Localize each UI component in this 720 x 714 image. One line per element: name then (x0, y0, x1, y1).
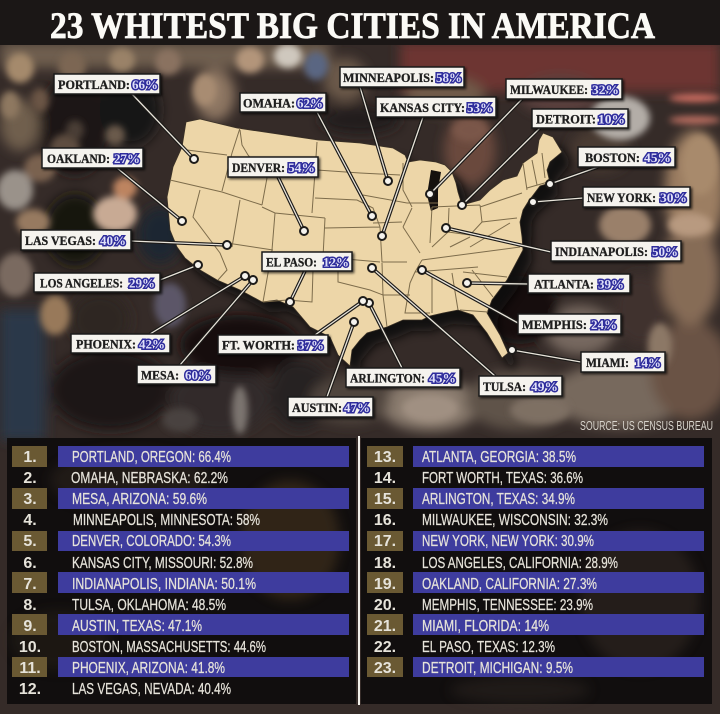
callout: Oakland (42, 148, 186, 225)
panel: ranking 1 to 12: 9. (23, 618, 37, 635)
callout: El Paso: EL PASO: (266, 254, 317, 270)
callout: Miami (508, 346, 665, 372)
callout: Miami: 14% (635, 355, 661, 370)
panel: ranking 13 to 23 (361, 438, 712, 704)
callout: Indianapolis: INDIANAPOLIS: (555, 244, 648, 259)
callout: Milwaukee (426, 79, 622, 198)
panel: ranking 1 to 12: OMAHA, NEBRASKA: 62.2% (71, 470, 228, 487)
callout: Boston: BOSTON: (585, 150, 640, 165)
panel: ranking 1 to 12: LAS VEGAS, NEVADA: 40.4% (72, 681, 231, 698)
callout: Arlington: ARLINGTON: (350, 370, 425, 386)
state borders (170, 128, 548, 327)
callout: Boston: 45% (644, 150, 671, 165)
callout: Omaha (240, 93, 376, 220)
panel: ranking 1 to 12: 11. (19, 660, 41, 677)
panel: ranking 13 to 23: EL PASO, TEXAS: 12.3% (422, 639, 555, 656)
callout: Arlington (346, 299, 460, 387)
panel: ranking 1 to 12: INDIANAPOLIS, INDIANA: 50.1% (72, 576, 256, 593)
callout: Indianapolis: 50% (652, 244, 678, 259)
title: 23 WHITEST BIG CITIES IN AMERICA (50, 6, 655, 47)
callout: Las Vegas: 40% (100, 233, 126, 248)
panel: ranking 13 to 23: FORT WORTH, TEXAS: 36.6% (422, 470, 583, 487)
callout: Portland: 66% (132, 77, 158, 92)
map of the United States (167, 119, 571, 377)
panel: ranking 1 to 12: 5. (23, 533, 37, 550)
panel: ranking 1 to 12: PHOENIX, ARIZONA: 41.8% (72, 660, 225, 677)
panel: ranking 13 to 23: 21. (374, 618, 396, 635)
panel: ranking 1 to 12: 7. (23, 576, 37, 593)
panel: ranking 1 to 12 (7, 438, 356, 704)
panel: ranking 13 to 23: 22. (374, 639, 396, 656)
callout: Minneapolis (340, 67, 464, 185)
callout: Milwaukee: MILWAUKEE: (510, 82, 588, 97)
panel: ranking 13 to 23: NEW YORK, NEW YORK: 30.9% (422, 533, 594, 550)
callout: Austin (288, 318, 373, 417)
callout: El Paso (262, 252, 352, 306)
callout: Las Vegas: LAS VEGAS: (25, 233, 96, 248)
panel: ranking 13 to 23: 16. (374, 512, 396, 529)
panel: ranking 13 to 23: 17. (374, 533, 396, 550)
panel: ranking 13 to 23: MILWAUKEE, WISCONSIN: 32.3% (422, 512, 608, 529)
callout: Atlanta (463, 274, 630, 293)
title bar (0, 0, 720, 47)
callout: Atlanta: 39% (598, 276, 624, 292)
panel: ranking 13 to 23: MEMPHIS, TENNESSEE: 23.9% (422, 597, 593, 614)
callout: Atlanta: ATLANTA: (534, 276, 594, 292)
callout: Detroit: 10% (598, 112, 625, 126)
panel: ranking 1 to 12: PORTLAND, OREGON: 66.4% (72, 449, 231, 466)
callout: Portland (54, 74, 198, 163)
callout: Kansas City (376, 97, 496, 240)
panel: ranking 1 to 12: TULSA, OKLAHOMA: 48.5% (72, 597, 226, 614)
callout: Mesa: 60% (185, 368, 211, 382)
panel: ranking 13 to 23: OAKLAND, CALIFORNIA: 27.3% (422, 576, 597, 593)
callout: Memphis: MEMPHIS: (522, 317, 587, 332)
callout: Tulsa (368, 264, 562, 396)
panel: ranking 1 to 12: 2. (23, 470, 37, 487)
callout: Tulsa: 49% (531, 379, 558, 394)
panel: ranking 1 to 12: 10. (19, 639, 41, 656)
callout: Memphis: 24% (591, 317, 617, 332)
panel: ranking 1 to 12: 8. (23, 597, 37, 614)
callout: Detroit (458, 109, 628, 209)
panel: ranking 13 to 23: ATLANTA, GEORGIA: 38.5% (422, 449, 576, 466)
callout: Minneapolis: MINNEAPOLIS: (343, 70, 434, 85)
callout: Detroit: DETROIT: (536, 112, 596, 126)
callout: Milwaukee: 32% (592, 82, 619, 97)
callout: Los Angeles: LOS ANGELES: (40, 276, 123, 290)
callout: Los Angeles (34, 261, 202, 292)
panel: ranking 13 to 23: 19. (374, 576, 396, 593)
callout: Oakland: 27% (114, 151, 140, 166)
panel: ranking 1 to 12: AUSTIN, TEXAS: 47.1% (72, 618, 202, 635)
callout: Las Vegas (21, 230, 231, 250)
callout: Memphis (418, 266, 621, 334)
panel: ranking 13 to 23: ARLINGTON, TEXAS: 34.9% (422, 491, 575, 508)
panel: ranking 13 to 23: MIAMI, FLORIDA: 14% (422, 618, 549, 635)
callout: Ft. Worth (218, 297, 367, 354)
callout: Ft. Worth: FT. WORTH: (222, 338, 295, 352)
panel: ranking 1 to 12: 12. (19, 681, 41, 698)
callout: Austin: AUSTIN: (292, 400, 342, 415)
panel: ranking 13 to 23: 20. (374, 597, 396, 614)
callout: Phoenix: PHOENIX: (76, 336, 136, 352)
callout: Indianapolis (442, 224, 681, 261)
panel: ranking 13 to 23: DETROIT, MICHIGAN: 9.5% (422, 660, 573, 677)
callout: Omaha: 62% (297, 96, 323, 110)
callout: Omaha: OMAHA: (243, 96, 295, 110)
callout: Denver: DENVER: (232, 160, 285, 175)
callout: Minneapolis: 58% (436, 70, 462, 85)
callout: New York: 30% (660, 190, 687, 205)
panel: ranking 1 to 12: 3. (23, 491, 37, 508)
panel: ranking 13 to 23: 13. (374, 449, 396, 466)
panel: ranking 13 to 23: 15. (374, 491, 396, 508)
callout: Oakland: OAKLAND: (47, 151, 110, 166)
callout: Phoenix: 42% (139, 336, 165, 352)
callout: Los Angeles: 29% (129, 276, 155, 290)
Lake Michigan (427, 170, 441, 211)
callout: Arlington: 45% (429, 370, 456, 386)
panel: ranking 1 to 12: MINNEAPOLIS, MINNESOTA: 58% (73, 512, 260, 529)
callout: Kansas City: 53% (467, 100, 493, 115)
callout: Austin: 47% (344, 400, 370, 415)
callout: Mesa (137, 276, 257, 384)
panel: ranking 1 to 12: BOSTON, MASSACHUSETTS: 44.6% (72, 639, 266, 656)
callout: New York: NEW YORK: (587, 190, 656, 205)
panel: ranking 13 to 23: 18. (374, 555, 396, 572)
panel: ranking 13 to 23: LOS ANGELES, CALIFORNIA: 28.9% (422, 555, 618, 572)
callout: New York (529, 187, 690, 207)
callout: Ft. Worth: 37% (298, 338, 324, 352)
callout: Kansas City: KANSAS CITY: (380, 100, 465, 115)
callout: Denver (228, 157, 318, 235)
callout: Mesa: MESA: (141, 368, 179, 382)
callout: Miami: MIAMI: (586, 355, 629, 370)
panel: ranking 1 to 12: KANSAS CITY, MISSOURI: 52.8% (72, 555, 253, 572)
callout: Tulsa: TULSA: (483, 379, 526, 394)
panel: ranking 1 to 12: 4. (23, 512, 37, 529)
callout: Phoenix (71, 272, 249, 353)
panel: ranking 13 to 23: 14. (374, 470, 396, 487)
panel: ranking 1 to 12: MESA, ARIZONA: 59.6% (72, 491, 207, 508)
panel: ranking 1 to 12: DENVER, COLORADO: 54.3% (72, 533, 231, 550)
callout: Portland: PORTLAND: (58, 77, 130, 92)
panel: ranking 13 to 23: 23. (374, 660, 396, 677)
panel: ranking 1 to 12: 1. (23, 449, 37, 466)
callout: Denver: 54% (288, 160, 315, 175)
panel: ranking 1 to 12: 6. (23, 555, 37, 572)
callout: Boston (546, 147, 675, 188)
callout: El Paso: 12% (323, 254, 349, 270)
